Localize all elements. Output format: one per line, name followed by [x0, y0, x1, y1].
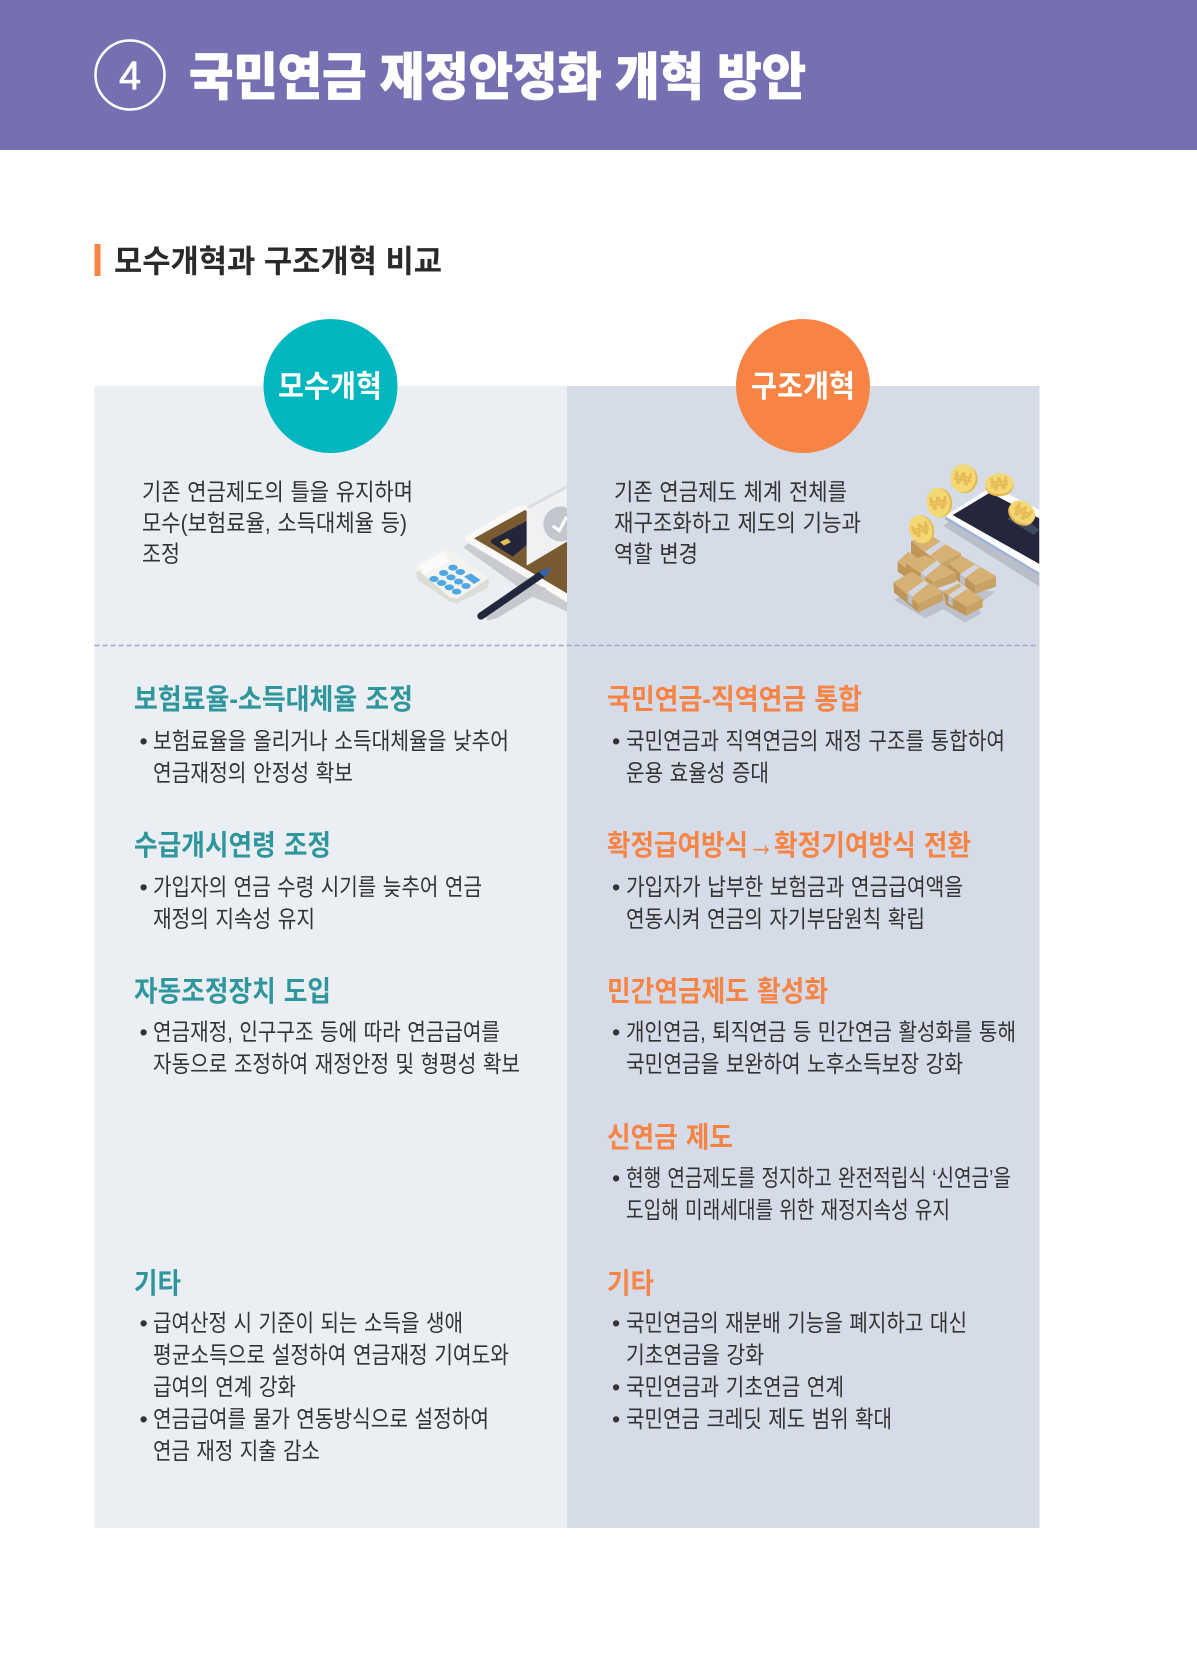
left item: 보험료율-소득대체율 조정: • [140, 728, 148, 754]
left item: 기타: 연금급여를 물가 연동방식으로 설정하여 [153, 1406, 489, 1432]
won bundles [893, 535, 996, 623]
won coins: ₩ [1009, 498, 1036, 526]
left item: 기타: 연금 재정 지출 감소 [153, 1438, 320, 1464]
left item: 수급개시연령 조정: 재정의 지속성 유지 [153, 906, 315, 932]
description: 구조개혁: 기존 연금제도 체계 전체를 [614, 479, 847, 505]
right item: 확정급여방식→확정기여방식 전환 [607, 823, 971, 932]
right item: 확정급여방식→확정기여방식 전환: 가입자가 납부한 보험금과 연금급여액을 [626, 874, 963, 900]
right item: 확정급여방식→확정기여방식 전환: 연동시켜 연금의 자기부담원칙 확립 [626, 906, 925, 932]
won coins: ₩ [909, 516, 933, 542]
right item: 기타: 기초연금을 강화 [626, 1342, 764, 1368]
right item: 민간연금제도 활성화: 개인연금, 퇴직연금 등 민간연금 활성화를 통해 [626, 1019, 1016, 1045]
description: 구조개혁: 재구조화하고 제도의 기능과 [614, 510, 861, 536]
won coins: ₩ [990, 472, 1009, 495]
left item: 기타: • [140, 1406, 148, 1432]
won coins: ₩ [952, 467, 974, 490]
illustration: phone, coins, won bundles [893, 462, 1040, 623]
left item: 자동조정장치 도입 [134, 976, 520, 1077]
left item: 자동조정장치 도입: 자동조정장치 도입 [134, 976, 331, 1008]
panel: 모수개혁 [94, 386, 1040, 1528]
right item: 국민연금-직역연금 통합: • [612, 728, 620, 754]
right item: 기타: • [612, 1310, 620, 1336]
right item: 확정급여방식→확정기여방식 전환: 확정급여방식 [607, 830, 748, 862]
badge: 모수개혁: 모수개혁 [278, 370, 382, 404]
left item: 기타: • [140, 1310, 148, 1336]
right item: 기타: 국민연금과 기초연금 연계 [626, 1374, 844, 1400]
right item: 기타: 국민연금의 재분배 기능을 폐지하고 대신 [626, 1310, 967, 1336]
left item: 수급개시연령 조정: • [140, 874, 148, 900]
right item: 확정급여방식→확정기여방식 전환: → [748, 823, 774, 865]
right item: 국민연금-직역연금 통합: 국민연금-직역연금 통합 [607, 684, 862, 716]
right item: 확정급여방식→확정기여방식 전환: 확정기여방식 전환 [774, 830, 971, 862]
left item: 기타: 급여산정 시 기준이 되는 소득을 생애 [153, 1310, 463, 1336]
right item: 국민연금-직역연금 통합: 국민연금과 직역연금의 재정 구조를 통합하여 [626, 728, 1005, 754]
description: 구조개혁 [614, 479, 861, 567]
right item: 신연금 제도: 도입해 미래세대를 위한 재정지속성 유지 [626, 1197, 950, 1223]
won coins [905, 462, 1040, 547]
left item: 자동조정장치 도입: • [140, 1019, 148, 1045]
right item: 기타: • [612, 1374, 620, 1400]
left item: 기타: 기타 [134, 1268, 181, 1300]
right item: 민간연금제도 활성화: 민간연금제도 활성화 [607, 976, 828, 1008]
badge: 구조개혁: 구조개혁 [751, 370, 855, 404]
right item: 신연금 제도 [607, 1122, 1011, 1223]
left item: 기타: 평균소득으로 설정하여 연금재정 기여도와 [153, 1342, 509, 1368]
description: 구조개혁: 역할 변경 [614, 541, 698, 567]
left item: 보험료율-소득대체율 조정: 보험료율-소득대체율 조정 [134, 684, 413, 716]
description: 모수개혁: 조정 [142, 541, 180, 567]
illustration: tablet, calculator, pen [414, 485, 578, 621]
right item: 민간연금제도 활성화: • [612, 1019, 620, 1045]
right item: 기타: 기타 [607, 1268, 654, 1300]
right item: 민간연금제도 활성화: 국민연금을 보완하여 노후소득보장 강화 [626, 1051, 963, 1077]
description: 모수개혁 [142, 479, 413, 567]
right item: 기타: • [612, 1406, 620, 1432]
right item: 신연금 제도: 현행 연금제도를 정지하고 완전적립식 ‘신연금’을 [626, 1165, 1011, 1191]
won coins: ₩ [929, 492, 948, 514]
description: 모수개혁: 기존 연금제도의 틀을 유지하며 [142, 479, 413, 505]
panel: 구조개혁 background [567, 386, 1040, 1528]
right item: 기타: 국민연금 크레딧 제도 범위 확대 [626, 1406, 892, 1432]
right item: 민간연금제도 활성화 [607, 976, 1016, 1077]
description: 모수개혁: 모수(보험료율, 소득대체율 등) [142, 510, 407, 536]
left item: 수급개시연령 조정 [134, 830, 482, 932]
left item: 보험료율-소득대체율 조정: 연금재정의 안정성 확보 [153, 760, 353, 786]
left item: 수급개시연령 조정: 수급개시연령 조정 [134, 830, 331, 862]
left item: 자동조정장치 도입: 자동으로 조정하여 재정안정 및 형평성 확보 [153, 1051, 520, 1077]
left item: 기타 [134, 1268, 509, 1464]
left item: 기타: 급여의 연계 강화 [153, 1374, 296, 1400]
right item: 국민연금-직역연금 통합: 운용 효율성 증대 [626, 760, 769, 786]
number badge [96, 40, 164, 110]
right item: 신연금 제도: 신연금 제도 [607, 1122, 733, 1154]
section heading: 모수개혁과 구조개혁 비교 [114, 243, 442, 279]
title: 국민연금 재정안정화 개혁 방안 [189, 49, 806, 106]
left item: 보험료율-소득대체율 조정 [134, 684, 509, 786]
left item: 보험료율-소득대체율 조정: 보험료율을 올리거나 소득대체율을 낮추어 [153, 728, 509, 754]
right item: 확정급여방식→확정기여방식 전환: • [612, 874, 620, 900]
header banner [0, 0, 1197, 150]
left item: 자동조정장치 도입: 연금재정, 인구구조 등에 따라 연금급여를 [153, 1019, 500, 1045]
badge: 모수개혁 [264, 319, 398, 453]
left item: 수급개시연령 조정: 가입자의 연금 수령 시기를 늦추어 연금 [153, 874, 482, 900]
right item: 국민연금-직역연금 통합 [607, 684, 1005, 786]
right item: 신연금 제도: • [612, 1165, 620, 1191]
number badge: 4 [119, 54, 141, 98]
badge: 구조개혁 [736, 319, 870, 453]
divider dashed line [94, 644, 1039, 646]
right item: 기타 [607, 1268, 967, 1432]
